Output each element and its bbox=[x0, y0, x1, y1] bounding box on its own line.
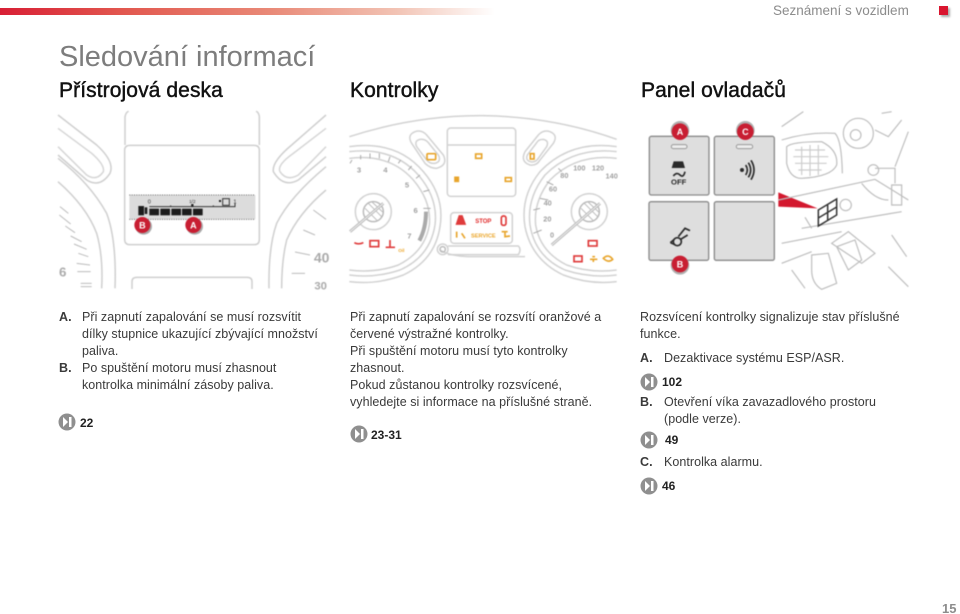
item B: kontrolka minimální zásoby paliva. bbox=[82, 378, 274, 392]
illustration: warning lights cluster: 100 bbox=[573, 164, 585, 173]
text block: warning lights: červené výstražné kontrolky. bbox=[350, 327, 509, 341]
section name: Seznámení s vozidlem bbox=[773, 3, 909, 18]
header gradient bar bbox=[0, 8, 495, 15]
item B: Po spuštění motoru musí zhasnout bbox=[82, 361, 276, 375]
illustration: warning lights cluster: 4 bbox=[383, 166, 388, 175]
illustration: fuel gauge display: 30 bbox=[314, 280, 327, 292]
illustration: fuel gauge display: B bbox=[139, 220, 146, 230]
reference: pages 23-31 bbox=[350, 426, 402, 442]
reference: page 102 bbox=[640, 374, 682, 390]
illustration: control panel switches bbox=[648, 110, 909, 290]
illustration: control panel switches: B bbox=[677, 259, 684, 269]
heading: control panel: Panel ovladačů bbox=[641, 79, 786, 102]
text block: warning lights: vyhledejte si informace na příslušné straně. bbox=[350, 395, 592, 409]
illustration: warning lights cluster: 120 bbox=[592, 164, 604, 173]
item A: dílky stupnice ukazující zbývající množství bbox=[82, 327, 318, 341]
reference: page 46: 46 bbox=[662, 479, 675, 493]
item B: boot lid: Otevření víka zavazadlového prostoru bbox=[664, 395, 876, 409]
item A: ESP/ASR: Dezaktivace systému ESP/ASR. bbox=[664, 351, 844, 365]
item B: boot lid: (podle verze). bbox=[664, 412, 741, 426]
illustration: warning lights cluster: STOP bbox=[475, 219, 491, 225]
illustration: control panel switches: C bbox=[742, 127, 749, 137]
item A: A. bbox=[59, 310, 72, 324]
illustration: warning lights cluster: 140 bbox=[606, 171, 618, 180]
item B: boot lid: B. bbox=[640, 395, 653, 409]
item B: B. bbox=[59, 361, 72, 375]
item A bbox=[59, 310, 318, 358]
page title: Sledování informací bbox=[59, 41, 315, 73]
illustration: warning lights cluster: 0 bbox=[550, 230, 554, 239]
illustration: warning lights cluster: 5 bbox=[405, 180, 410, 189]
reference: page 22 bbox=[58, 414, 93, 430]
reference: page 102: 102 bbox=[662, 375, 682, 389]
item C: alarm: C. bbox=[640, 455, 653, 469]
heading: warning lights: Kontrolky bbox=[350, 79, 438, 102]
illustration: fuel gauge display: 6 bbox=[59, 265, 66, 280]
illustration: warning lights cluster: 3 bbox=[357, 166, 361, 175]
item C: alarm: Kontrolka alarmu. bbox=[664, 455, 763, 469]
illustration: warning lights cluster: Oil bbox=[398, 248, 404, 253]
illustration: warning lights cluster: 40 bbox=[544, 198, 552, 207]
item A: Při zapnutí zapalování se musí rozsvítit bbox=[82, 310, 301, 324]
text block: warning lights: Při zapnutí zapalování se rozsvítí oranžové a bbox=[350, 310, 601, 324]
text block: warning lights: Pokud zůstanou kontrolky rozsvícené, bbox=[350, 378, 562, 392]
header red square bbox=[939, 6, 948, 15]
illustration: warning lights cluster: 6 bbox=[414, 206, 418, 215]
heading: instrument panel: Přístrojová deska bbox=[59, 79, 223, 102]
item A: paliva. bbox=[82, 344, 118, 358]
text block: warning lights bbox=[350, 310, 602, 409]
illustration: fuel gauge display: 1/2 bbox=[189, 199, 196, 204]
illustration: fuel gauge display: 1 bbox=[233, 199, 237, 205]
illustration: fuel gauge display bbox=[58, 110, 330, 292]
illustration: fuel gauge display: A bbox=[190, 220, 197, 230]
reference: page 49: 49 bbox=[665, 433, 678, 447]
reference: page 46 bbox=[640, 478, 675, 494]
illustration: warning lights cluster: 80 bbox=[560, 171, 568, 180]
reference: page 49 bbox=[640, 432, 678, 448]
text block: control panel intro: funkce. bbox=[640, 327, 681, 341]
illustration: fuel gauge display: 40 bbox=[314, 250, 330, 266]
reference: page 22: 22 bbox=[80, 416, 93, 430]
illustration: fuel gauge display: 0 bbox=[148, 199, 151, 205]
text block: warning lights: Při spuštění motoru musí tyto kontrolky bbox=[350, 344, 568, 358]
item B bbox=[59, 361, 276, 392]
illustration: warning lights cluster bbox=[349, 114, 618, 284]
text block: warning lights: zhasnout. bbox=[350, 361, 405, 375]
illustration: warning lights cluster: 7 bbox=[407, 231, 411, 240]
illustration: control panel switches: OFF bbox=[671, 178, 687, 187]
text block: control panel intro bbox=[640, 310, 900, 341]
illustration: warning lights cluster: SERVICE bbox=[471, 234, 496, 240]
item A: ESP/ASR: A. bbox=[640, 351, 653, 365]
reference: pages 23-31: 23-31 bbox=[371, 428, 402, 442]
illustration: warning lights cluster: 60 bbox=[549, 184, 557, 193]
text block: control panel intro: Rozsvícení kontrolky signalizuje stav příslušné bbox=[640, 310, 900, 324]
illustration: control panel switches: A bbox=[677, 127, 684, 137]
text block: instrument panel bbox=[59, 310, 318, 392]
item B: boot lid bbox=[640, 395, 876, 426]
illustration: warning lights cluster: 20 bbox=[543, 214, 551, 223]
